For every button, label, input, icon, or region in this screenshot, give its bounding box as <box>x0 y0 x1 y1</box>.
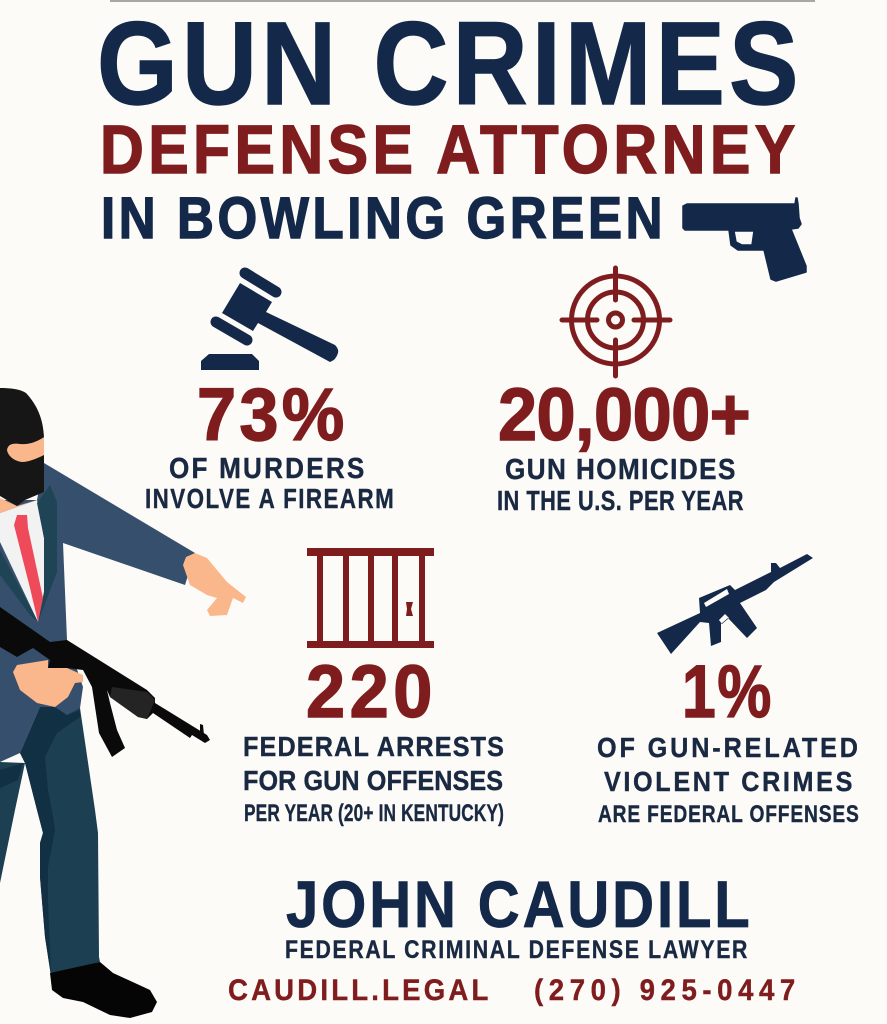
eye slit <box>7 437 44 462</box>
stat: 1% federal offenses: ARE FEDERAL OFFENSES <box>598 800 859 828</box>
stat: 73% of murders: OF MURDERS <box>169 452 364 484</box>
stat: 220 federal arrests: FOR GUN OFFENSES <box>243 765 503 796</box>
stat: 20,000+ gun homicides: IN THE U.S. PER YEAR <box>497 485 743 517</box>
stat: 220 federal arrests: PER YEAR (20+ IN KENTUCKY) <box>244 800 504 827</box>
hand on rifle <box>13 660 83 707</box>
mask <box>0 388 44 506</box>
icon: gavel <box>201 273 338 370</box>
icon: pistol <box>683 198 806 281</box>
jacket <box>0 463 195 762</box>
contact block: (270) 925-0447 <box>534 974 795 1007</box>
title <box>97 0 798 251</box>
contact block: CAUDILL.LEGAL <box>228 974 488 1007</box>
neck <box>0 498 37 513</box>
shoe <box>50 962 157 1018</box>
stat: 1% federal offenses: VIOLENT CRIMES <box>604 766 852 797</box>
title: DEFENSE ATTORNEY <box>100 110 795 188</box>
rifle <box>0 607 210 757</box>
stat: 220 federal arrests <box>243 651 504 827</box>
stat: 73% of murders: INVOLVE A FIREARM <box>145 484 394 515</box>
contact block <box>228 869 795 1007</box>
title: GUN CRIMES <box>97 0 798 129</box>
contact block: JOHN CAUDILL <box>286 869 750 942</box>
stat: 1% federal offenses: 1% <box>682 651 771 733</box>
tie <box>14 515 43 622</box>
stat: 1% federal offenses <box>597 651 859 828</box>
pointing hand <box>183 553 246 616</box>
stat: 220 federal arrests: FEDERAL ARRESTS <box>243 731 504 762</box>
illustration: masked man in suit with rifle <box>0 388 246 1018</box>
icon: assault rifle <box>657 554 813 654</box>
right leg <box>20 707 100 976</box>
shirt <box>0 500 44 622</box>
left leg <box>0 762 25 883</box>
stat: 1% federal offenses: OF GUN-RELATED <box>597 732 858 763</box>
stat: 20,000+ gun homicides <box>497 374 751 517</box>
icon: jail bars <box>307 548 434 648</box>
stat: 220 federal arrests: 220 <box>306 651 432 733</box>
stat: 20,000+ gun homicides: GUN HOMICIDES <box>505 453 735 485</box>
stat: 20,000+ gun homicides: 20,000+ <box>498 374 751 456</box>
contact block: FEDERAL CRIMINAL DEFENSE LAWYER <box>285 935 748 963</box>
stat: 73% of murders: 73% <box>197 374 344 456</box>
handguard <box>110 687 155 719</box>
icon: target <box>562 268 670 376</box>
lapels <box>0 485 57 622</box>
trouser shadows <box>0 707 80 976</box>
title: IN BOWLING GREEN <box>101 186 662 251</box>
stat: 73% of murders <box>145 374 394 515</box>
